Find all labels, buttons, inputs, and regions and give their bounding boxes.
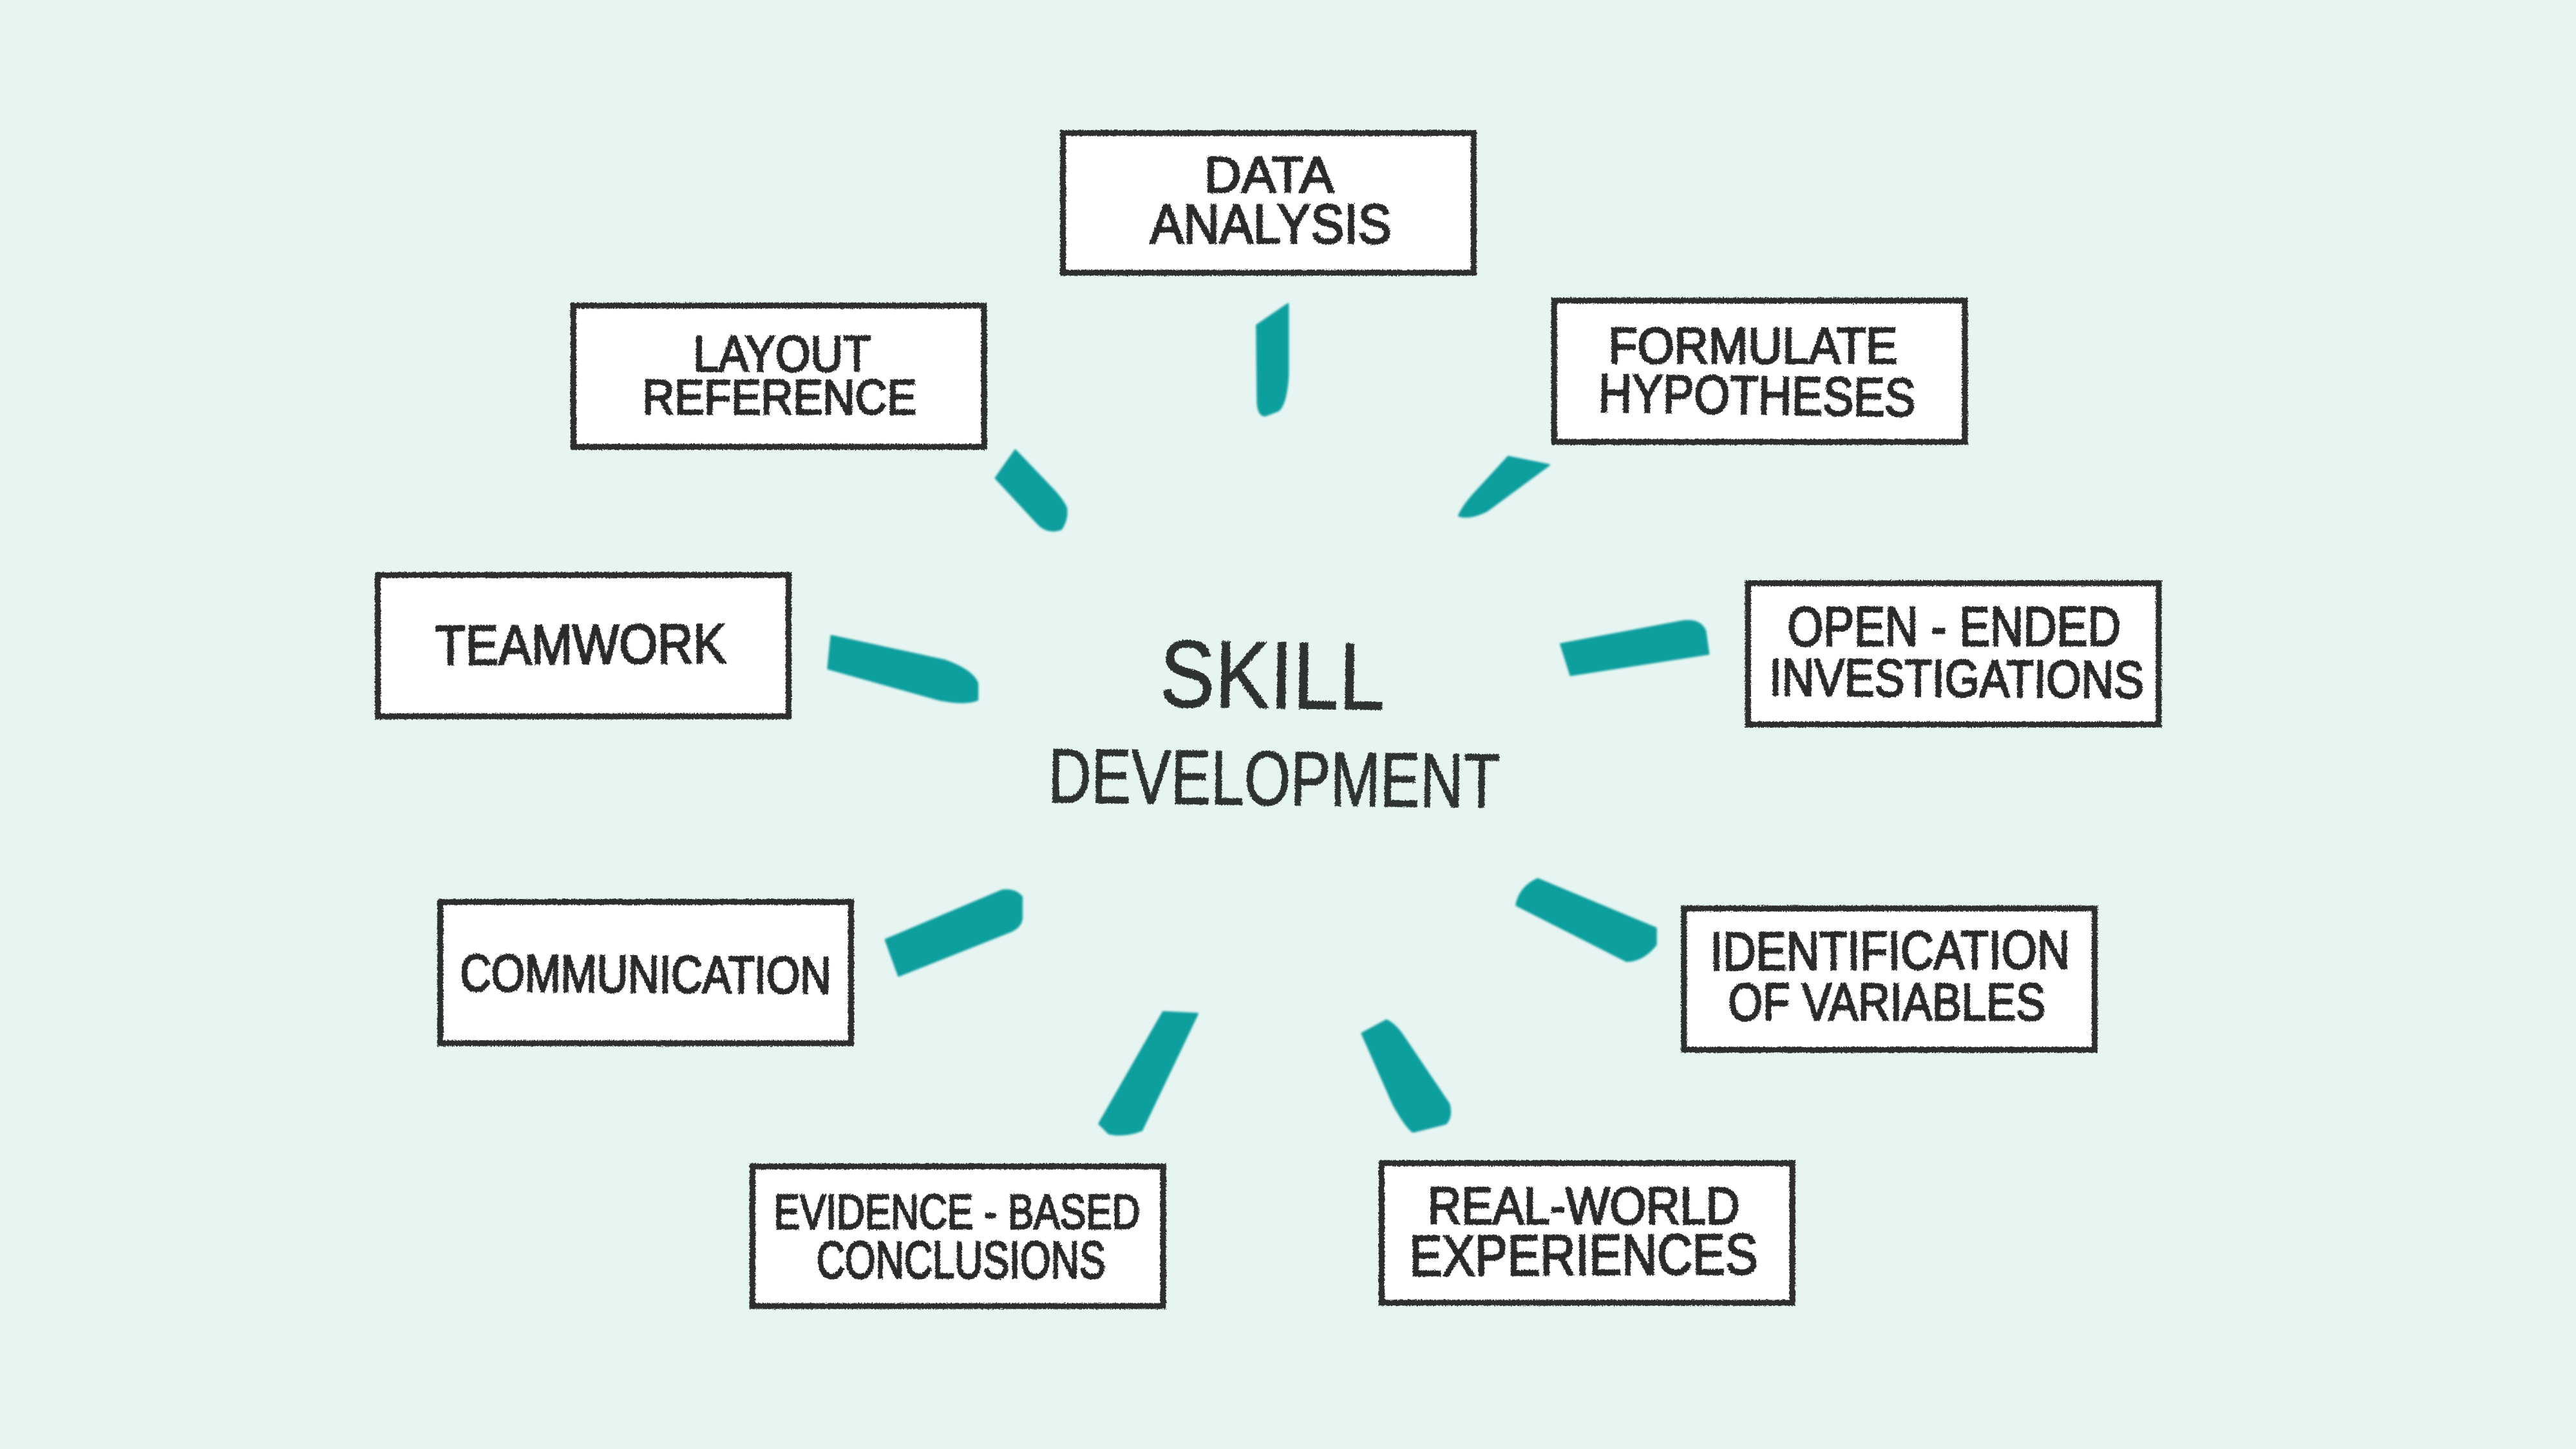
- stroke to layout reference: [996, 450, 1066, 531]
- stroke to communication: [886, 890, 1022, 976]
- central title: SKILL: [1159, 621, 1386, 730]
- box: evidence-based conclusions: EVIDENCE - BASED: [774, 1185, 1140, 1240]
- box: open-ended investigations: OPEN - ENDED: [1788, 596, 2121, 658]
- box: real-world experiences: REAL-WORLD: [1428, 1177, 1740, 1236]
- central title: DEVELOPMENT: [1048, 733, 1501, 824]
- box: identification of variables: OF VARIABLES: [1728, 973, 2045, 1032]
- stroke to formulate hypotheses: [1459, 457, 1549, 516]
- stroke to real-world experiences: [1362, 1020, 1450, 1132]
- central title: [1048, 621, 1501, 824]
- box: evidence-based conclusions: [752, 1166, 1163, 1306]
- box: identification of variables: [1684, 909, 2095, 1050]
- box: open-ended investigations: [1748, 583, 2159, 724]
- box: layout reference: [573, 305, 984, 447]
- box: real-world experiences: [1381, 1163, 1792, 1303]
- box: data analysis: [1063, 133, 1473, 272]
- stroke to teamwork: [828, 636, 978, 703]
- connector strokes: teal brush marks: [828, 304, 1709, 1135]
- box: evidence-based conclusions: CONCLUSIONS: [817, 1231, 1106, 1290]
- box: formulate hypotheses: HYPOTHESES: [1598, 363, 1916, 428]
- stroke to identification of variables: [1517, 879, 1656, 961]
- stroke to open-ended investigations: [1560, 621, 1709, 675]
- box: data analysis: DATA: [1204, 146, 1334, 203]
- box: identification of variables: IDENTIFICATION: [1710, 920, 2070, 982]
- box: teamwork: TEAMWORK: [435, 612, 726, 677]
- box: layout reference: LAYOUT: [694, 325, 871, 383]
- box: communication: [440, 902, 851, 1043]
- box: real-world experiences: EXPERIENCES: [1410, 1222, 1758, 1288]
- stroke to evidence-based conclusions: [1099, 1012, 1198, 1135]
- box: communication: COMMUNICATION: [460, 944, 831, 1005]
- box: data analysis: ANALYSIS: [1150, 193, 1392, 256]
- box: layout reference: REFERENCE: [642, 370, 916, 425]
- box: open-ended investigations: INVESTIGATIONS: [1769, 649, 2144, 710]
- box: teamwork: [378, 575, 788, 716]
- box: formulate hypotheses: [1554, 301, 1965, 442]
- stroke to data analysis: [1257, 304, 1288, 415]
- box: formulate hypotheses: FORMULATE: [1608, 317, 1897, 374]
